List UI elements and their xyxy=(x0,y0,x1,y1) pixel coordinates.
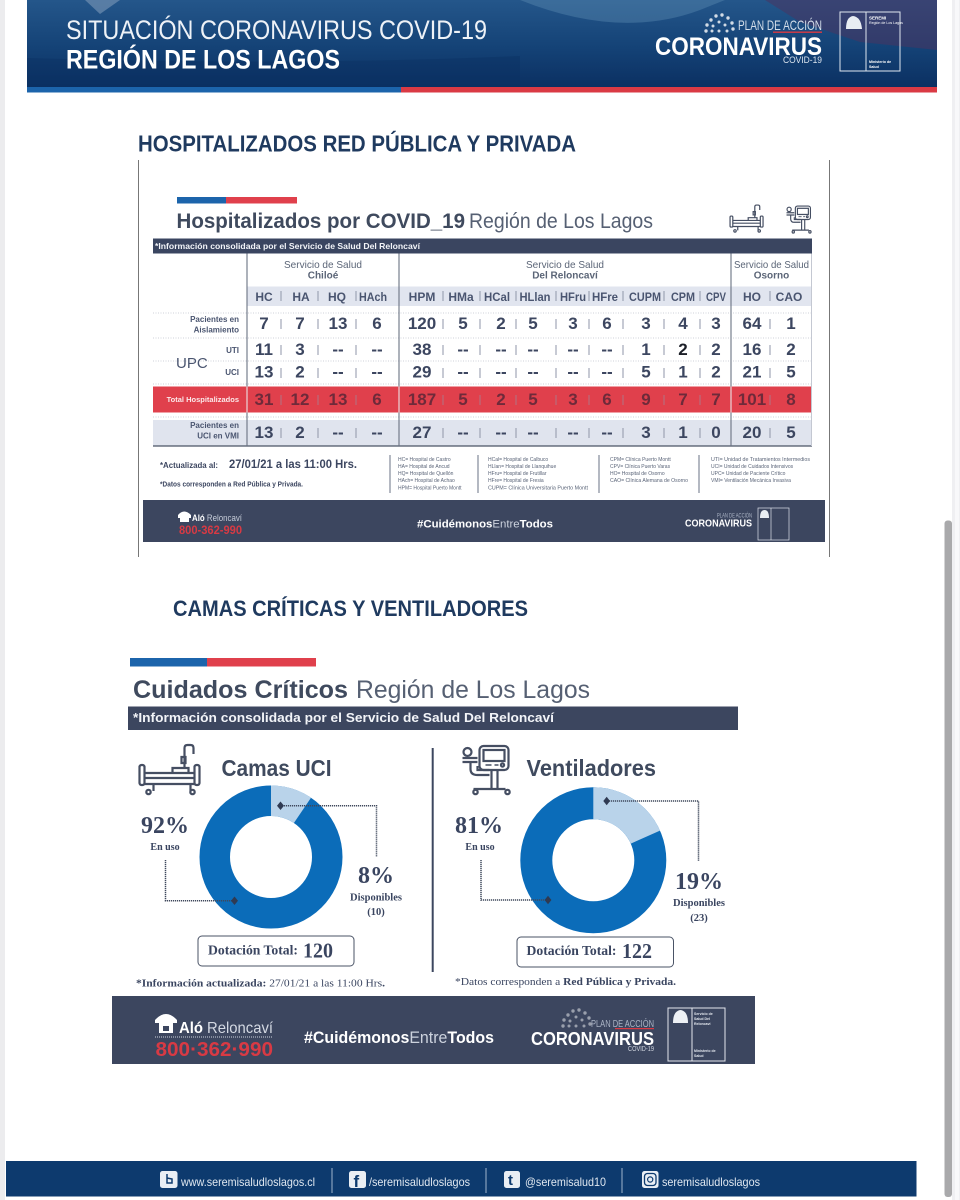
leader lines: camas uci xyxy=(166,806,376,901)
coronavirus logo: PLAN DE ACCIÓN xyxy=(591,1017,654,1030)
row: UCI en VMI: 2 xyxy=(295,423,305,442)
table title: Región de Los Lagos xyxy=(469,210,653,233)
row: UCI en VMI: -- xyxy=(495,423,507,442)
total box: camas: 120 xyxy=(303,938,333,962)
row labels: UCI xyxy=(225,368,239,377)
row: UCI en VMI: 5 xyxy=(786,423,796,442)
row: UCI: 2 xyxy=(711,362,721,382)
coronavirus logo: COVID-19 xyxy=(628,1046,654,1053)
legend of abbreviations: HFru= Hospital de Frutillar xyxy=(488,471,547,477)
panel: hospitalizados table xyxy=(138,160,830,557)
stat: 81% en uso xyxy=(455,813,503,853)
stat: 8% disponibles xyxy=(350,863,402,918)
row: UTI: 2 xyxy=(678,340,688,359)
row: UCI en VMI: -- xyxy=(457,423,469,442)
column headers: HFru xyxy=(560,290,586,304)
row: total hospitalizados: 187 xyxy=(408,390,436,409)
donut chart: ventiladores xyxy=(536,787,660,917)
row: UCI: -- xyxy=(527,362,539,382)
row: UTI: -- xyxy=(371,340,383,359)
stat: 81% en uso: En uso xyxy=(465,842,495,853)
row: UCI: -- xyxy=(601,362,613,382)
column headers: HPM xyxy=(409,290,435,304)
row: UTI xyxy=(255,340,796,359)
header title: REGIÓN DE LOS LAGOS xyxy=(66,44,340,74)
row: aislamiento: 120 xyxy=(408,314,436,333)
row labels: UCI en VMI xyxy=(197,432,239,440)
legend of abbreviations xyxy=(390,455,811,493)
row: total hospitalizados: 3 xyxy=(568,390,578,409)
service headers: Servicio de Salud xyxy=(526,259,604,271)
plan de acción logo xyxy=(655,13,822,65)
row: aislamiento xyxy=(259,314,796,333)
legend of abbreviations: HA= Hospital de Ancud xyxy=(398,464,450,470)
row: UCI: 2 xyxy=(295,362,305,382)
column headers: HA xyxy=(292,290,310,304)
table footer band: Aló Reloncaví xyxy=(192,513,242,523)
accent bar xyxy=(177,197,297,204)
stat: 8% disponibles: (10) xyxy=(367,907,385,918)
row: UCI en VMI: 20 xyxy=(743,423,761,442)
row: aislamiento: 7 xyxy=(295,314,305,333)
legend of abbreviations: HLlan= Hospital de Llanquihue xyxy=(488,464,556,470)
info bar xyxy=(128,706,738,730)
row: UCI en VMI: -- xyxy=(527,423,539,442)
legend of abbreviations: CUPM= Clínica Universitaria Puerto Montt xyxy=(488,486,589,492)
column headers: CAO xyxy=(776,290,802,304)
row: UTI: 2 xyxy=(711,340,721,359)
link: instagram xyxy=(642,1171,760,1189)
info bar: *Información consolidada por el Servicio de Salud Del Reloncaví xyxy=(155,241,421,251)
link: tumblr: @seremisalud10 xyxy=(525,1175,606,1189)
row: UCI: -- xyxy=(457,362,469,382)
alo reloncavi xyxy=(155,1020,274,1061)
heading: hospitalizados: HOSPITALIZADOS RED PÚBLICA Y PRIVADA xyxy=(138,130,576,156)
icon: ventilator xyxy=(787,206,811,233)
row: aislamiento: 1 xyxy=(786,314,796,333)
link: instagram: seremisaludloslagos xyxy=(662,1175,760,1189)
service headers: Del Reloncaví xyxy=(532,270,599,282)
row: UCI: 5 xyxy=(786,362,796,382)
table title xyxy=(176,210,653,233)
update note xyxy=(160,459,357,488)
row: UCI: 29 xyxy=(413,362,431,382)
row: UCI en VMI xyxy=(255,423,796,442)
row: UTI: -- xyxy=(332,340,344,359)
row: UTI: 38 xyxy=(413,340,431,359)
table title: Hospitalizados por COVID_19 xyxy=(176,210,465,233)
row: total hospitalizados: 12 xyxy=(291,390,309,409)
panel title: Cuidados Críticos xyxy=(133,676,348,704)
coronavirus logo: CORONAVIRUS xyxy=(531,1029,654,1049)
legend of abbreviations: UCI= Unidad de Cuidados Intensivos xyxy=(711,464,794,470)
row labels: UPC xyxy=(176,355,208,372)
column headers xyxy=(255,290,802,304)
table footer band: CORONAVIRUS xyxy=(685,518,752,530)
row: total hospitalizados: 9 xyxy=(641,390,651,409)
legend of abbreviations: HAch= Hospital de Achao xyxy=(398,478,455,484)
footer bar xyxy=(6,1161,916,1196)
row: UCI: 5 xyxy=(641,362,651,382)
row: UTI: 1 xyxy=(641,340,651,359)
panel: cuidados críticos xyxy=(112,658,755,1064)
ministry logo: Reloncaví xyxy=(694,1022,712,1026)
alo reloncavi: 800·362·990 xyxy=(156,1039,273,1061)
legend of abbreviations: CAO= Clínica Alemana de Osorno xyxy=(610,478,688,484)
total box: ventiladores xyxy=(517,937,674,967)
legend of abbreviations: UPC= Unidad de Paciente Crítico xyxy=(711,471,786,477)
row: UCI: 1 xyxy=(678,362,688,382)
stat: 19% disponibles: Disponibles xyxy=(673,898,725,909)
row: UTI: -- xyxy=(457,340,469,359)
row: UCI: -- xyxy=(495,362,507,382)
alo reloncavi: Aló xyxy=(179,1020,203,1037)
plan de acción logo: PLAN DE ACCIÓN xyxy=(738,17,822,33)
legend of abbreviations: CPV= Clínica Puerto Varas xyxy=(610,464,671,470)
legend of abbreviations: HCal= Hospital de Calbuco xyxy=(488,457,548,463)
row: aislamiento: 5 xyxy=(458,314,468,333)
row: UTI: -- xyxy=(495,340,507,359)
row: UCI en VMI: -- xyxy=(601,423,613,442)
row: aislamiento: 64 xyxy=(743,314,762,333)
legend of abbreviations: HO= Hospital de Osorno xyxy=(610,471,665,477)
row: total hospitalizados: 6 xyxy=(372,390,382,409)
row: aislamiento: 7 xyxy=(259,314,269,333)
link: tumblr xyxy=(504,1171,606,1189)
table footer band: PLAN DE ACCIÓN xyxy=(717,512,752,520)
ministry logo: Salud xyxy=(694,1054,704,1058)
scrollbar xyxy=(944,0,960,1200)
service headers: Chiloé xyxy=(308,270,339,282)
header title: SITUACIÓN CORONAVIRUS COVID-19 xyxy=(66,14,487,45)
service headers xyxy=(284,259,809,282)
ministry logo: Servicio de xyxy=(694,1012,713,1016)
link: website: www.seremisaludloslagos.cl xyxy=(180,1175,315,1189)
stat: 92% en uso: 92% xyxy=(141,813,189,839)
icon: bed xyxy=(730,205,763,232)
hashtag: #CuidémonosEntreTodos xyxy=(304,1028,494,1047)
row labels: Pacientes en xyxy=(190,315,239,324)
link: facebook: f xyxy=(354,1172,360,1191)
accent bar xyxy=(130,658,316,666)
seremi logo: SEREMI xyxy=(869,16,886,20)
stat: 81% en uso: 81% xyxy=(455,813,503,839)
leader lines: ventiladores xyxy=(481,801,698,900)
row labels: UTI xyxy=(226,346,239,355)
row: UCI en VMI: -- xyxy=(332,423,344,442)
row: UCI en VMI: 1 xyxy=(678,423,688,442)
panel title: Región de Los Lagos xyxy=(356,676,590,704)
row: UCI en VMI: -- xyxy=(567,423,579,442)
alo reloncavi: Reloncaví xyxy=(207,1020,274,1037)
row labels: Aislamiento xyxy=(194,326,239,334)
row labels: Total Hospitalizados xyxy=(167,395,239,404)
row: UCI: 13 xyxy=(255,362,273,382)
total box: ventiladores: 122 xyxy=(622,939,652,963)
legend of abbreviations: UTI= Unidad de Tratamientos Intermedios xyxy=(711,457,811,463)
heading: ventiladores: Ventiladores xyxy=(526,755,656,781)
coronavirus logo xyxy=(531,1008,654,1053)
row: UCI en VMI: 13 xyxy=(255,423,273,442)
row: aislamiento: 3 xyxy=(711,314,721,333)
legend of abbreviations: CPM= Clínica Puerto Montt xyxy=(610,457,671,463)
ministry logo: Ministerio de xyxy=(694,1049,716,1053)
service headers: Osorno xyxy=(754,270,789,282)
row: aislamiento: 2 xyxy=(496,314,506,333)
row: total hospitalizados: 13 xyxy=(329,390,347,409)
column headers: HO xyxy=(743,290,761,304)
table footer band: #CuidémonosEntreTodos xyxy=(417,518,553,530)
link: facebook: /seremisaludloslagos xyxy=(369,1175,470,1189)
header banner xyxy=(27,0,937,92)
seremi logo: Ministerio de xyxy=(869,60,891,64)
column headers: HFre xyxy=(592,290,618,304)
legend of abbreviations: HQ= Hospital de Quellón xyxy=(398,471,454,477)
stat: 8% disponibles: 8% xyxy=(358,863,394,889)
plan de acción logo: CORONAVIRUS xyxy=(655,33,822,61)
total box: camas: Dotación Total: xyxy=(208,944,298,958)
link: website xyxy=(160,1171,315,1189)
heading: camas críticas: CAMAS CRÍTICAS Y VENTILADORES xyxy=(173,596,528,621)
row: aislamiento: 6 xyxy=(602,314,612,333)
divider xyxy=(432,748,434,972)
icon: bed xyxy=(140,745,200,794)
legend of abbreviations: HPM= Hospital Puerto Montt xyxy=(398,486,462,492)
donut chart: camas uci xyxy=(215,785,327,913)
markers: ventiladores xyxy=(545,797,610,904)
total box: ventiladores: Dotación Total: xyxy=(526,944,616,959)
row: aislamiento: 3 xyxy=(641,314,651,333)
row: total hospitalizados: 31 xyxy=(255,390,273,409)
row: UTI: -- xyxy=(567,340,579,359)
stat: 92% en uso xyxy=(141,813,189,853)
seremi logo xyxy=(840,12,903,71)
row: UTI: -- xyxy=(601,340,613,359)
update note: *Datos corresponden a Red Pública y Privada. xyxy=(160,482,303,488)
row: total hospitalizados: 2 xyxy=(496,390,506,409)
row labels: Pacientes en xyxy=(190,421,239,430)
column headers: HAch xyxy=(359,290,387,304)
row: aislamiento: 5 xyxy=(528,314,538,333)
row: UCI: -- xyxy=(332,362,344,382)
row: UCI: -- xyxy=(567,362,579,382)
column headers: CPM xyxy=(671,290,695,304)
row: total hospitalizados: 7 xyxy=(678,390,688,409)
link: tumblr: t xyxy=(508,1172,513,1189)
update note: 27/01/21 a las 11:00 Hrs. xyxy=(229,459,357,471)
row: aislamiento: 3 xyxy=(568,314,578,333)
row: UTI: 3 xyxy=(295,340,305,359)
row: UTI: -- xyxy=(527,340,539,359)
row: UCI: 21 xyxy=(743,362,761,382)
service headers: Servicio de Salud xyxy=(734,259,809,271)
header title xyxy=(66,14,487,74)
table footer band xyxy=(143,500,825,542)
stat: 8% disponibles: Disponibles xyxy=(350,892,402,904)
icon: ventilator xyxy=(462,746,510,794)
heading: camas uci: Camas UCI xyxy=(222,755,332,781)
service headers: Servicio de Salud xyxy=(284,259,362,271)
table footer band: 800-362-990 xyxy=(179,523,242,537)
column headers: HC xyxy=(255,290,273,304)
row: total hospitalizados: 7 xyxy=(711,390,721,409)
row: UTI: 11 xyxy=(255,340,273,359)
stat: 92% en uso: En uso xyxy=(150,842,180,853)
note: actualizada: *Información actualizada: 27/01/21 a las 11:00 Hrs . xyxy=(136,978,385,990)
panel footer band xyxy=(112,996,755,1064)
column headers: HQ xyxy=(328,290,346,304)
row: UTI: 2 xyxy=(786,340,796,359)
row: UCI xyxy=(255,362,796,382)
note: datos: *Datos corresponden a Red Pública y Privada. xyxy=(455,976,676,988)
row: UTI: 16 xyxy=(743,340,761,359)
row: aislamiento: 13 xyxy=(329,314,347,333)
ministry logo xyxy=(668,1008,725,1061)
seremi logo: Salud xyxy=(869,65,879,69)
row: UCI en VMI: 27 xyxy=(413,423,431,442)
row: UCI en VMI: 0 xyxy=(711,423,721,442)
row: total hospitalizados: 6 xyxy=(602,390,612,409)
column headers: HLlan xyxy=(520,290,550,304)
legend of abbreviations: HC= Hospital de Castro xyxy=(398,457,451,463)
stat: 19% disponibles: (23) xyxy=(690,913,708,924)
row: total hospitalizados: 101 xyxy=(738,390,766,409)
row labels xyxy=(167,315,239,440)
row: aislamiento: 6 xyxy=(372,314,382,333)
plan de acción logo: COVID-19 xyxy=(783,55,822,65)
row: UCI en VMI: 3 xyxy=(641,423,651,442)
legend of abbreviations: VMI= Ventilación Mecánica Invasiva xyxy=(711,478,791,484)
stat: 19% disponibles xyxy=(673,869,725,924)
seremi logo: Región de Los Lagos xyxy=(869,21,903,25)
row: total hospitalizados: 5 xyxy=(528,390,538,409)
info bar: *Información consolidada por el Servicio de Salud Del Reloncaví xyxy=(133,710,554,725)
row: UCI: -- xyxy=(371,362,383,382)
table bands xyxy=(153,254,812,446)
legend of abbreviations: HFre= Hospital de Fresia xyxy=(488,478,544,484)
total box: camas xyxy=(198,936,354,966)
ministry logo: Salud Del xyxy=(694,1017,710,1021)
info bar xyxy=(153,238,812,254)
row: total hospitalizados: 8 xyxy=(786,390,796,409)
markers: camas uci xyxy=(231,802,284,905)
row: total hospitalizados xyxy=(255,390,796,409)
column headers: HCal xyxy=(484,290,510,304)
row: total hospitalizados: 5 xyxy=(458,390,468,409)
column headers: HMa xyxy=(448,290,474,304)
row: UCI en VMI: -- xyxy=(371,423,383,442)
icon: phone xyxy=(155,1014,177,1033)
stat: 19% disponibles: 19% xyxy=(675,869,723,895)
row: aislamiento: 4 xyxy=(678,314,688,333)
panel title xyxy=(133,676,590,704)
update note: *Actualizada al: xyxy=(160,460,218,470)
link: facebook xyxy=(349,1171,470,1191)
column headers: CPV xyxy=(706,290,726,304)
column headers: CUPM xyxy=(629,290,661,304)
